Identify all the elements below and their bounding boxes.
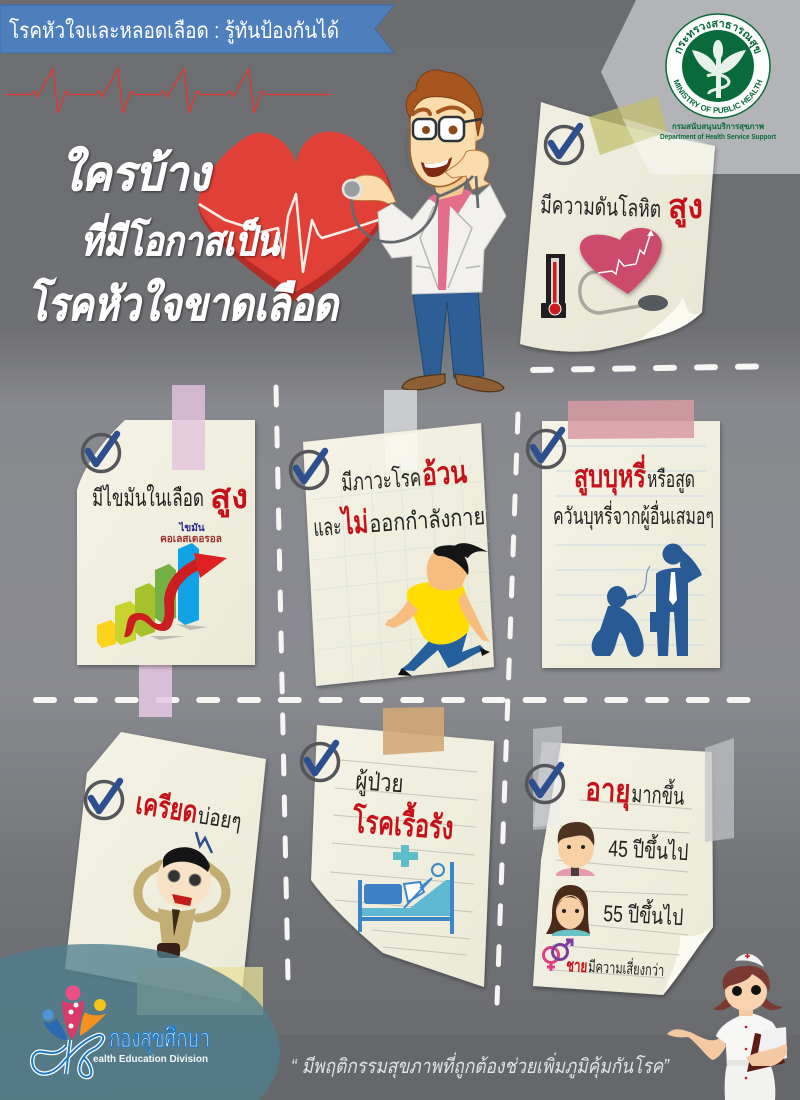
tape bbox=[384, 390, 417, 462]
nurse neck bbox=[739, 1002, 753, 1016]
tape bbox=[568, 400, 694, 439]
text: ผู้ป่วย bbox=[355, 767, 404, 799]
check mark bbox=[302, 743, 338, 780]
text: หรือสูด bbox=[647, 466, 695, 493]
tape overlap bbox=[533, 742, 562, 827]
text: และ bbox=[313, 513, 342, 542]
nurse skirt bbox=[725, 1064, 775, 1100]
paper bbox=[542, 421, 720, 668]
tape upper bbox=[172, 385, 205, 470]
title: ที่มีโอกาสเป็น bbox=[81, 213, 280, 264]
nurse blouse bbox=[716, 1012, 783, 1064]
doctor neck bbox=[432, 172, 468, 200]
text: ควันบุหรี่จากผู้อื่นเสมอๆ bbox=[553, 500, 714, 530]
panel: stress bbox=[65, 732, 266, 1015]
icon: gender symbol bbox=[544, 940, 572, 971]
doctor legs bbox=[412, 288, 484, 380]
text: อ้วน bbox=[421, 454, 468, 492]
nurse cap cross bbox=[745, 954, 750, 958]
ministry department text: กรมสนับสนุนบริการสุขภาพ bbox=[672, 122, 764, 132]
text: สูง bbox=[210, 478, 248, 518]
paper bbox=[65, 732, 266, 1003]
logo english text: ealth Education Division bbox=[93, 1054, 208, 1065]
icon: woman face bbox=[546, 885, 590, 936]
ministry arc text thai: กระทรวงสาธารณสุข bbox=[676, 20, 761, 54]
icon: stressed man bbox=[138, 832, 226, 958]
nurse buttons bbox=[745, 1026, 747, 1079]
big heart bbox=[198, 132, 392, 302]
text: มีภาวะโรค bbox=[340, 464, 422, 497]
text: ออกกำลังกาย bbox=[368, 503, 486, 538]
doctor shirt bbox=[428, 187, 472, 290]
ministry arc text english: MINISTRY OF PUBLIC HEALTH bbox=[674, 79, 762, 113]
ministry logo bbox=[622, 13, 776, 174]
text: มีความเสี่ยงกว่า bbox=[588, 955, 665, 980]
text bbox=[309, 453, 486, 543]
doctor arm hand bbox=[352, 175, 396, 204]
logo bubble bbox=[0, 944, 280, 1100]
doctor hair bbox=[406, 70, 483, 136]
bottom quote band bbox=[270, 1035, 800, 1100]
check mark bbox=[526, 765, 564, 802]
text bbox=[553, 454, 714, 530]
figures bbox=[42, 986, 106, 1040]
paper bbox=[533, 743, 713, 995]
doctor bbox=[343, 70, 506, 392]
text: โรคเรื้อรัง bbox=[351, 797, 455, 846]
text: มากขึ้น bbox=[631, 776, 685, 811]
nurse cap bbox=[735, 954, 764, 967]
chart labels: คอเลสเตอรอล bbox=[160, 534, 222, 545]
nurse clipboard bbox=[747, 1033, 785, 1072]
text: บ่อยๆ bbox=[196, 802, 243, 835]
icon: pink heart with gauge bbox=[580, 228, 668, 313]
doctor ear bbox=[474, 123, 484, 142]
bar shadows bbox=[150, 624, 208, 640]
stethoscope bbox=[352, 128, 478, 242]
chart labels: ไขมัน bbox=[178, 521, 205, 534]
icon: thermometer bbox=[541, 254, 566, 318]
text: มีความดันโลหิต bbox=[540, 191, 662, 223]
stethoscope head bbox=[343, 180, 361, 198]
title bbox=[27, 146, 341, 330]
doctor coat bbox=[378, 185, 506, 294]
text bbox=[566, 771, 689, 980]
check mark bbox=[546, 126, 582, 164]
dashed dividers bbox=[36, 366, 757, 1003]
panel: high blood fat bbox=[77, 385, 255, 717]
doctor shoes bbox=[402, 374, 504, 392]
red arrow bbox=[124, 558, 200, 637]
tape lower bbox=[139, 630, 172, 717]
panel: obesity and no exercise bbox=[290, 390, 494, 686]
check mark bbox=[528, 430, 564, 468]
nurse hair pigtails bbox=[713, 993, 783, 1010]
nurse eyes bbox=[732, 985, 761, 996]
script H bbox=[32, 1035, 103, 1077]
title: โรคหัวใจขาดเลือด bbox=[27, 277, 341, 330]
ministry logo: Department of Health Service Support bbox=[660, 132, 776, 141]
paper grid bbox=[310, 456, 493, 682]
tapes behind bbox=[533, 726, 562, 830]
paper bbox=[77, 420, 255, 665]
tape bbox=[383, 707, 444, 755]
nurse bbox=[667, 954, 787, 1100]
doctor eyes bbox=[422, 126, 458, 134]
text: เครียด bbox=[133, 787, 200, 830]
paper lines bbox=[552, 800, 692, 978]
paper lines bbox=[556, 446, 706, 645]
panel: high blood pressure bbox=[520, 96, 715, 352]
doctor face bbox=[410, 84, 477, 187]
doctor glasses bbox=[413, 117, 482, 141]
panel: smoking bbox=[528, 400, 720, 668]
panel: chronic disease bbox=[302, 707, 494, 987]
doctor mouth bbox=[421, 157, 452, 177]
banner: โรคหัวใจและหลอดเลือด : รู้ทันป้องกันได้ bbox=[9, 18, 339, 44]
icon: hospital bed with patient bbox=[358, 845, 454, 934]
tape bbox=[137, 967, 263, 1015]
paper curl bbox=[640, 297, 702, 340]
chart labels bbox=[160, 521, 222, 545]
banner bbox=[0, 5, 394, 53]
doctor eyebrows bbox=[413, 108, 464, 114]
title: ใครบ้าง bbox=[60, 146, 213, 201]
text bbox=[92, 478, 248, 518]
paper bbox=[311, 725, 494, 987]
bar chart with arrow bbox=[97, 543, 227, 648]
text: ชาย bbox=[566, 956, 588, 976]
tape over paper bbox=[384, 433, 418, 470]
nurse face bbox=[725, 973, 767, 1011]
text: สูง bbox=[668, 188, 703, 228]
icon: running woman bbox=[385, 543, 490, 676]
ecg line red bbox=[6, 69, 331, 113]
caduceus emblem bbox=[692, 40, 746, 98]
tape bbox=[589, 96, 667, 155]
text: สูบบุหรี่ bbox=[574, 454, 646, 496]
nurse belt bbox=[727, 1060, 771, 1066]
icon: smokers bbox=[592, 544, 702, 657]
icon: man face bbox=[556, 822, 595, 876]
paper bbox=[520, 102, 715, 352]
check mark bbox=[290, 451, 328, 488]
nurse outstretched arm bbox=[667, 1029, 726, 1060]
paper curl bbox=[663, 927, 713, 995]
text: ไม่ bbox=[339, 503, 369, 541]
paper lines bbox=[330, 760, 477, 955]
text: อายุ bbox=[584, 771, 631, 812]
panel: age bbox=[526, 726, 734, 995]
nurse hair bbox=[723, 966, 770, 992]
text bbox=[351, 767, 455, 846]
text: 55 ปีขึ้นไป bbox=[603, 897, 684, 930]
nurse hand bbox=[746, 1044, 787, 1066]
check mark bbox=[82, 434, 120, 472]
translucent panel over paper bbox=[622, 118, 715, 174]
paper bbox=[303, 423, 494, 686]
logo thai text: กองสุขศึกษา bbox=[109, 1023, 210, 1055]
text: มีไขมันในเลือด bbox=[92, 484, 204, 512]
health education logo bbox=[32, 986, 210, 1077]
doctor coat lapels and pockets bbox=[416, 206, 480, 288]
check mark bbox=[86, 781, 122, 818]
top right light panel bbox=[601, 0, 800, 174]
quote: “ มีพฤติกรรมสุขภาพที่ถูกต้องช่วยเพิ่มภูมิคุ้มกันโรค” bbox=[291, 1052, 670, 1079]
bars bbox=[97, 620, 116, 648]
tape right bbox=[705, 738, 734, 842]
doctor raised hand bbox=[445, 150, 490, 190]
text: 45 ปีขึ้นไป bbox=[608, 832, 689, 865]
